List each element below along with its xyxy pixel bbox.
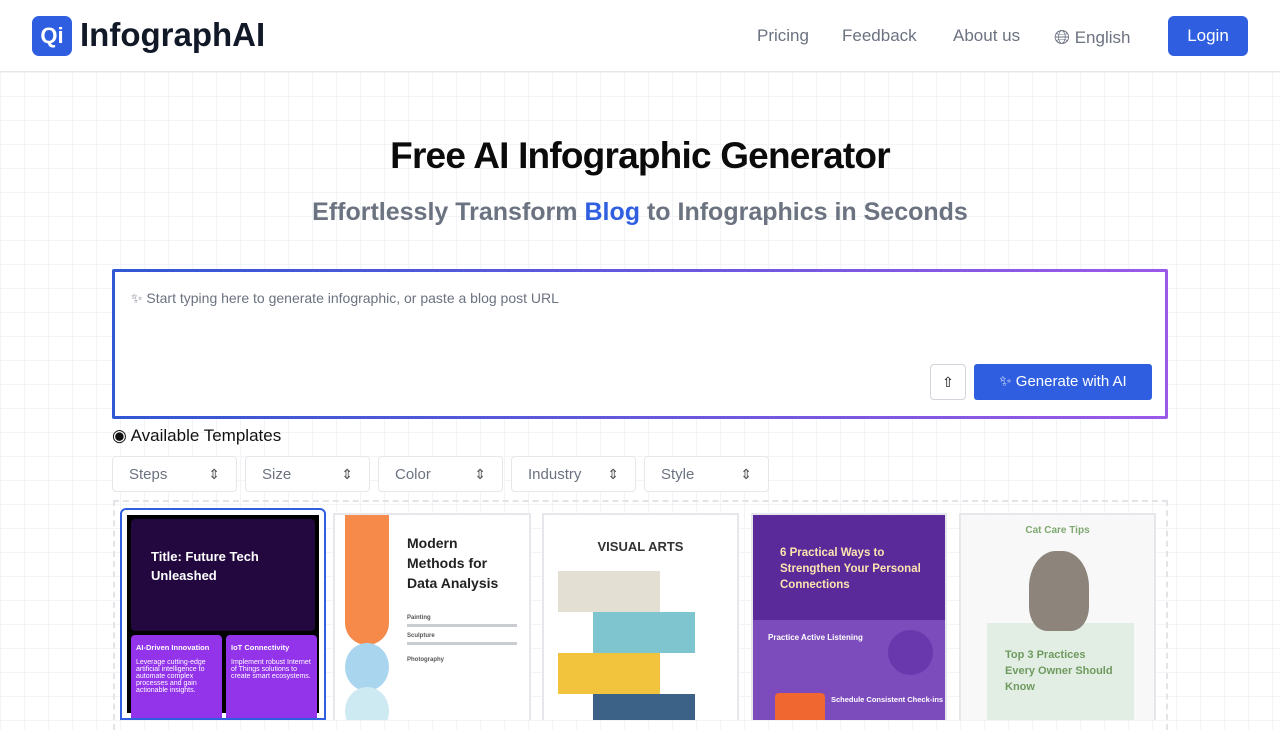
card: future tech: Title: Future Tech [151, 549, 259, 564]
card: data analysis: Photography [407, 657, 444, 663]
filter: style [644, 456, 769, 492]
card: cat care: Know [1005, 681, 1035, 693]
card: future tech [120, 508, 326, 720]
nav: language: 🌐︎ English [1054, 27, 1130, 49]
card: future tech: IoT Connectivity [231, 643, 289, 652]
nav: pricing: Pricing [757, 26, 809, 45]
filter: industry: Industry [528, 466, 581, 483]
login button: Login [1187, 26, 1229, 45]
filter: style: Style [661, 466, 694, 483]
card: personal connections: Schedule Consistent Check-ins [831, 695, 943, 704]
placeholder text: ✨︎ Start typing here to generate infographic, or paste a blog post URL [131, 290, 559, 306]
logo [32, 16, 265, 56]
filter: size: Size [262, 466, 291, 483]
generate button [974, 364, 1152, 400]
title: Free AI Infographic Generator [390, 135, 890, 176]
card: personal connections: 6 Practical Ways to [780, 547, 884, 559]
header [0, 0, 1280, 72]
filter: steps: Steps [129, 466, 167, 483]
card: personal connections: Strengthen Your Personal [780, 563, 921, 575]
filter: size: ⇕ [341, 466, 353, 482]
card: data analysis: Modern [407, 535, 458, 551]
card: data analysis: Painting [407, 615, 431, 621]
filter: color: ⇕ [474, 466, 486, 482]
card: future tech: Leverage cutting-edge artificial intelligence to automate complex processes and gain actionable insights. [136, 659, 206, 694]
card: future tech: Unleashed [151, 568, 217, 583]
icon: upload [930, 364, 966, 400]
filter: steps [112, 456, 237, 492]
subtitle: Effortlessly Transform Blog to Infographics in Seconds [312, 198, 968, 226]
card: future tech: AI-Driven Innovation [136, 643, 209, 652]
card: visual arts [542, 513, 739, 720]
filter: style: ⇕ [740, 466, 752, 482]
card: future tech: Implement robust Internet of Things solutions to create smart ecosystems. [231, 659, 311, 680]
filter: steps: ⇕ [208, 466, 220, 482]
card: cat care: Top 3 Practices [1005, 649, 1086, 661]
card: personal connections [751, 513, 947, 720]
card: visual arts: VISUAL ARTS [598, 539, 683, 554]
template gallery [113, 500, 1168, 730]
nav: feedback: Feedback [842, 26, 917, 45]
card: data analysis: Methods for [407, 555, 487, 571]
icon: logo mark: Qi [40, 23, 64, 48]
card: data analysis: Sculpture [407, 633, 435, 639]
templates heading: ◉ Available Templates [112, 426, 281, 445]
card: cat care [959, 513, 1156, 720]
nav: about: About us [953, 26, 1020, 45]
filter: industry: ⇕ [607, 466, 619, 482]
card: cat care: Cat Care Tips [1025, 525, 1090, 536]
brand name: InfographAI [80, 16, 265, 53]
filter: color: Color [395, 466, 431, 483]
card: data analysis: Data Analysis [407, 575, 498, 591]
filter: color [378, 456, 503, 492]
login button [1168, 16, 1248, 56]
card: cat care: Every Owner Should [1005, 665, 1113, 677]
card: personal connections: Practice Active Listening [768, 633, 863, 642]
card: data analysis [333, 513, 531, 720]
input box [112, 269, 1168, 419]
card: personal connections: Connections [780, 579, 850, 591]
icon: logo mark [32, 16, 72, 56]
generate button: ✨︎ Generate with AI [999, 373, 1127, 390]
icon: upload: ⇧ [942, 374, 954, 390]
filter: size [245, 456, 370, 492]
filter: industry [511, 456, 636, 492]
